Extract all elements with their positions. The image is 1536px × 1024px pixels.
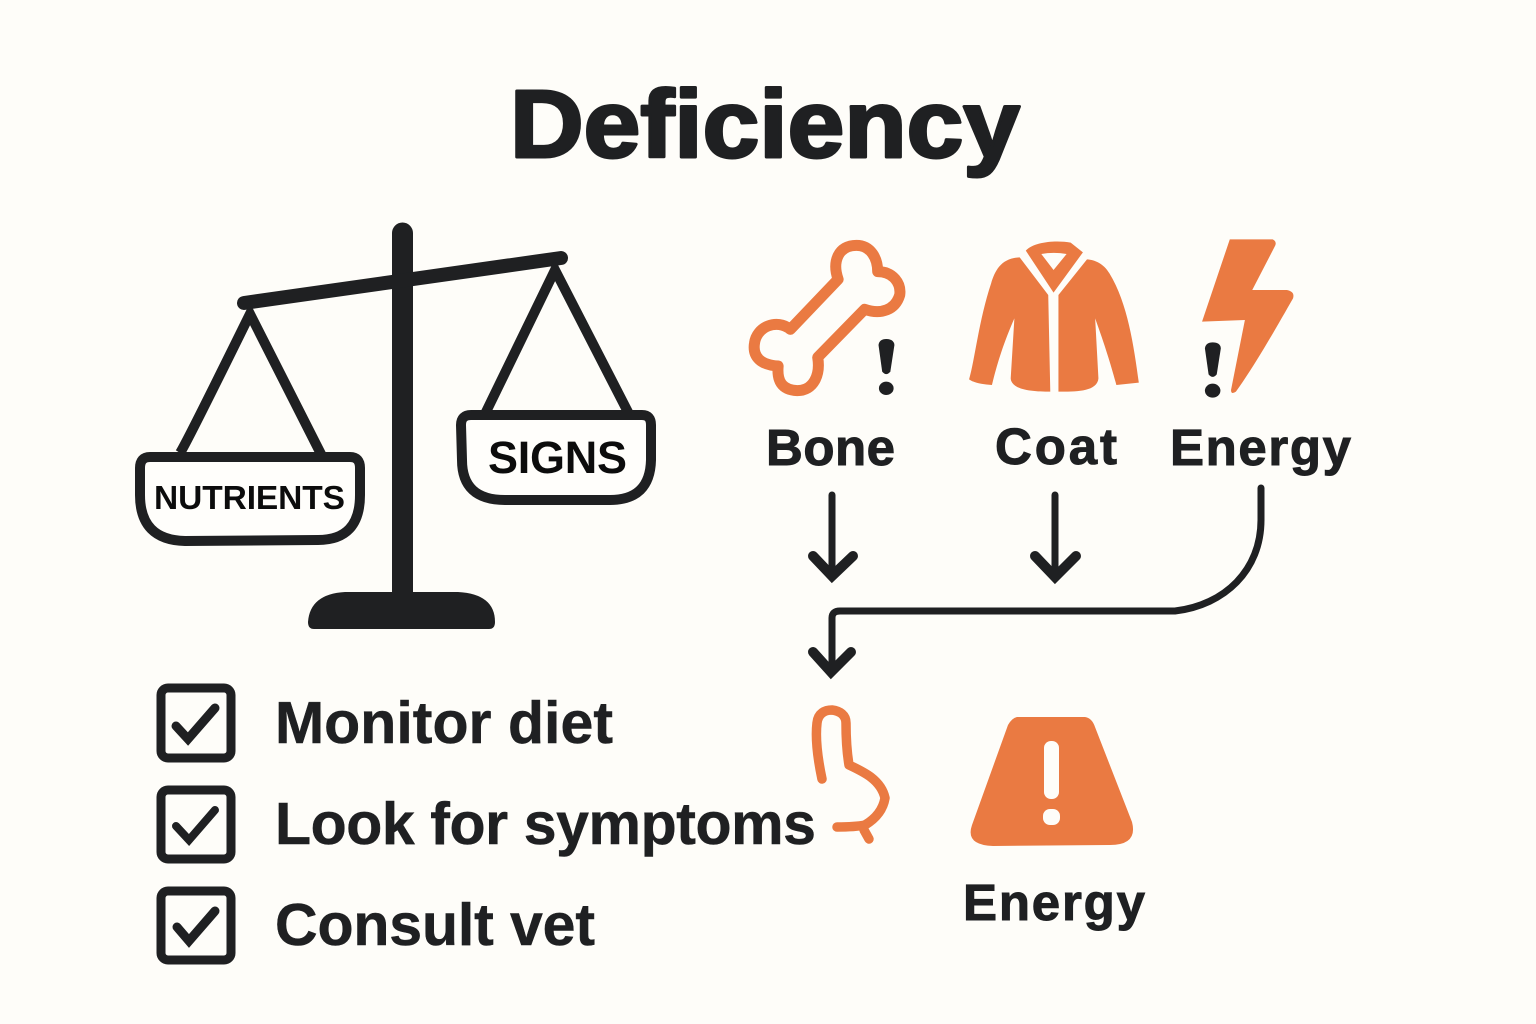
label: bone: Bone <box>766 419 895 476</box>
icon: lightning bolt <box>1202 239 1293 393</box>
arrow: coat down <box>1035 495 1076 577</box>
arrow: energy curved to throat <box>813 488 1261 672</box>
icon: bone <box>754 245 900 391</box>
checklist item: monitor diet: Monitor diet <box>275 690 613 756</box>
icon: energy warning mark <box>1205 342 1221 398</box>
icon: throat outline <box>816 710 885 839</box>
scale beam <box>244 258 561 303</box>
title: Deficiency <box>510 71 1020 178</box>
right pan: signs: SIGNS <box>488 432 627 483</box>
left pan: nutrients: NUTRIENTS <box>154 480 345 517</box>
checklist item: consult vet: Consult vet <box>275 892 595 958</box>
label: energy: Energy <box>1170 419 1352 476</box>
icon: balance scale <box>140 223 651 629</box>
right pan: signs <box>461 415 651 500</box>
icon: coat <box>969 242 1139 392</box>
left pan strings <box>180 314 322 456</box>
icon: bone warning mark <box>879 339 894 395</box>
scale pole and base <box>308 223 495 629</box>
label: coat: Coat <box>995 418 1117 475</box>
right pan strings <box>485 270 629 414</box>
checklist item: look for symptoms: Look for symptoms <box>275 791 816 857</box>
icon: warning trapezoid <box>971 717 1133 846</box>
left pan: nutrients <box>140 457 360 541</box>
label: energy warning: Energy <box>963 874 1146 931</box>
arrow: bone down <box>813 495 853 576</box>
